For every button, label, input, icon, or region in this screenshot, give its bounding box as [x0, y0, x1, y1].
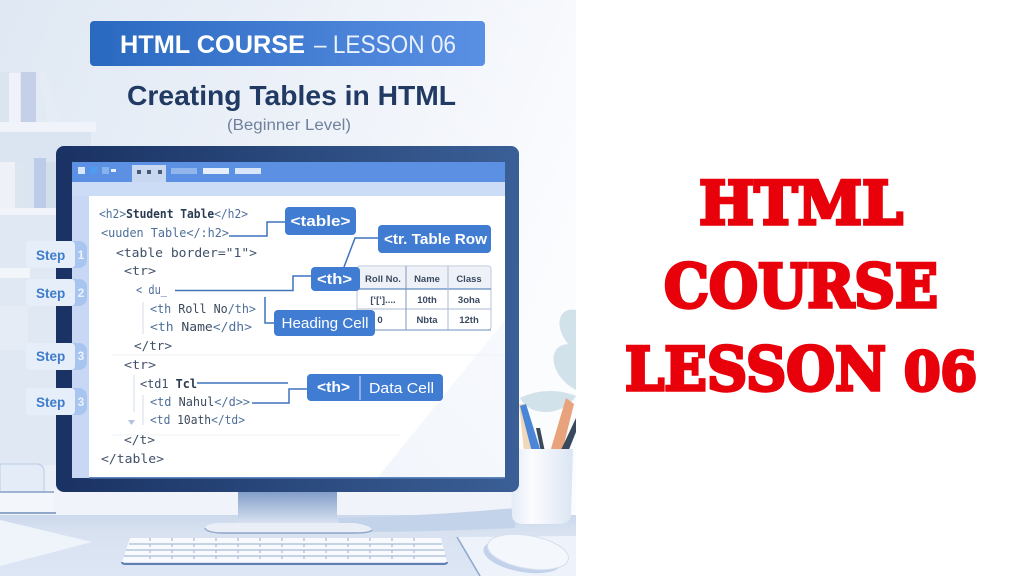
preview table: [ʻ[ʻ].... [370, 295, 396, 306]
preview table: Name [414, 274, 440, 285]
step badge 2 [26, 279, 87, 306]
step badge 3: Step [36, 349, 65, 364]
connector lines [175, 222, 378, 403]
code listing: < du_ [136, 282, 167, 297]
code listing: </table> [101, 451, 164, 466]
step badge 1 [26, 241, 87, 268]
mouse pad [457, 536, 576, 576]
code listing: <td 10ath</td> [150, 412, 245, 427]
monitor bezel [56, 146, 519, 492]
callout: heading cell [274, 310, 375, 336]
screen [72, 162, 505, 478]
code listing: <td1 Tcl [140, 376, 197, 391]
panel: right title [576, 0, 1024, 576]
preview table: Roll No. [365, 274, 401, 285]
code area [89, 196, 505, 478]
title: Creating Tables in HTML [127, 80, 456, 111]
step badge 3 second: Step [36, 395, 65, 410]
headline line 1: HTML [699, 169, 903, 239]
callout: data cell: Data Cell [369, 380, 434, 397]
paper sheet [0, 520, 92, 566]
code listing: <th Roll No/th> [150, 301, 256, 316]
callout: th: <th> [317, 271, 352, 288]
preview table: Nbta [416, 315, 438, 326]
heading banner: – LESSON 06 [314, 31, 456, 59]
keyboard [122, 538, 447, 564]
callout: table: <table> [290, 213, 351, 230]
heading banner: HTML COURSE [120, 31, 305, 59]
step badge 2: Step [36, 286, 65, 301]
callout: data cell [307, 374, 443, 401]
preview table: 10th [417, 295, 437, 306]
code listing: </tr> [134, 338, 172, 353]
pen cup [510, 449, 573, 524]
preview table: Class [456, 274, 482, 285]
callout: heading cell: Heading Cell [282, 315, 368, 332]
leaves [520, 310, 576, 412]
code listing: <uuden Table</:h2> [101, 225, 229, 240]
step badge 1: 1 [78, 248, 85, 262]
step badge 3 second: 3 [78, 395, 85, 409]
step badge 1: Step [36, 248, 65, 263]
subtitle: (Beginner Level) [227, 117, 351, 134]
step badge 3 second [26, 388, 87, 415]
monitor stand [238, 490, 337, 524]
desk [0, 515, 576, 576]
step badge 3 [26, 343, 87, 370]
background wall [0, 0, 576, 576]
callout: table row [378, 225, 491, 253]
preview table: 3oha [458, 295, 481, 306]
preview table: 12th [459, 315, 479, 326]
code listing: <td Nahul</d>> [150, 394, 250, 409]
mouse [481, 529, 571, 576]
headline line 3: 06 [904, 341, 977, 403]
code listing: <tr> [124, 263, 156, 278]
pens in cup [519, 398, 576, 452]
callout: th [311, 267, 360, 291]
code listing: <th Name</dh> [150, 319, 252, 334]
code listing: <table border="1"> [116, 245, 257, 260]
callout: table [285, 207, 356, 235]
screen toolbar [72, 162, 505, 182]
stand base [205, 523, 372, 533]
code listing: <tr> [124, 357, 156, 372]
bookshelf [0, 70, 96, 465]
step badge 2: 2 [78, 286, 85, 300]
preview table [357, 266, 491, 330]
book stack [0, 464, 56, 514]
desk shadow [337, 508, 515, 532]
panel: thumbnail illustration [0, 0, 576, 576]
callout: table row: <tr. Table Row [384, 231, 487, 248]
monitor [56, 146, 519, 492]
preview table: 0 [377, 315, 383, 326]
heading banner [90, 21, 485, 66]
callout: data cell: <th> [317, 379, 350, 396]
code listing: <h2>Student Table</h2> [99, 206, 248, 221]
headline line 3: LESSON [625, 335, 886, 405]
code listing [99, 206, 505, 466]
headline line 2: COURSE [664, 252, 938, 322]
step badge 3: 3 [78, 349, 85, 363]
code listing: </t> [124, 432, 155, 447]
